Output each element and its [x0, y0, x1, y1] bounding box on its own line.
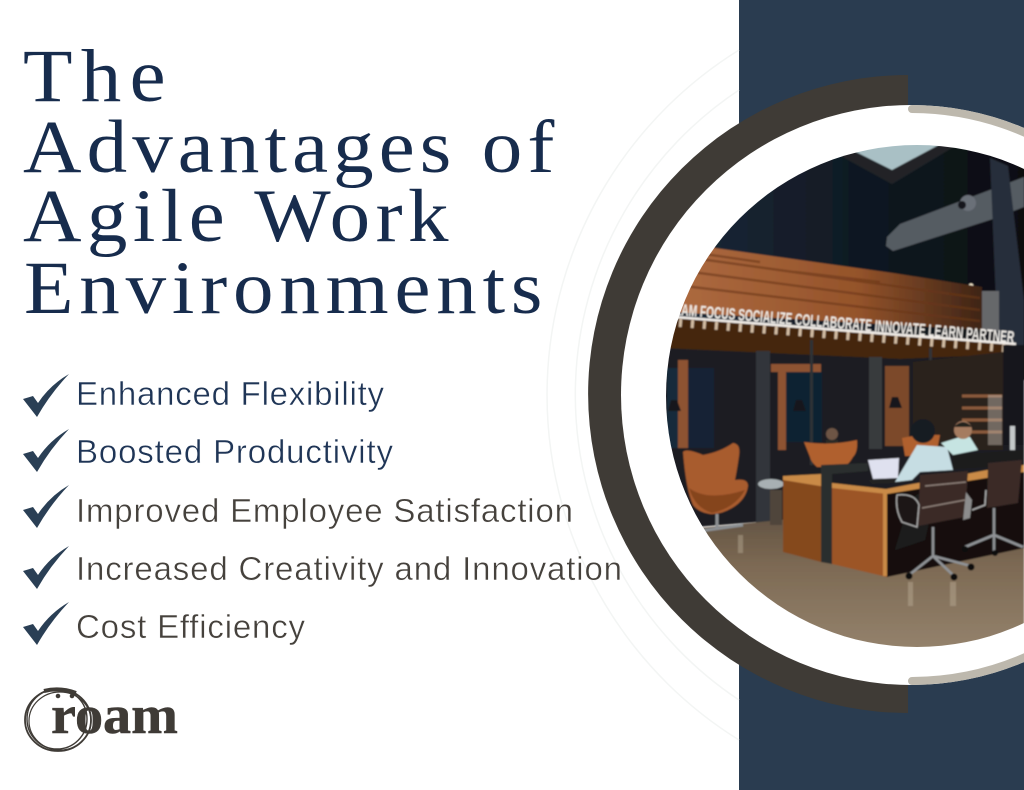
navy side panel — [739, 0, 1024, 790]
photo: pendant lamps — [668, 397, 902, 411]
photo: foreground office chair — [897, 471, 974, 580]
photo: seated background person — [826, 428, 838, 446]
photo: back right wall — [981, 291, 999, 331]
photo: wood feature wall — [672, 247, 982, 330]
logo wordmark: roam — [51, 685, 178, 745]
title: Agile Work — [23, 174, 450, 257]
taupe arc — [912, 109, 1024, 681]
list item: Improved Employee Satisfaction: Improved Employee Satisfaction — [76, 492, 573, 529]
logo rings — [25, 689, 91, 751]
photo: polished floor — [702, 519, 1024, 647]
photo: wooden desk — [783, 450, 1024, 577]
photo: glass office wall — [660, 340, 1024, 530]
photo: slatted canopy — [660, 316, 1018, 359]
list item: Cost Efficiency — [23, 602, 306, 645]
roam logo — [25, 685, 178, 751]
advantages list — [23, 374, 622, 645]
photo: monitor — [1010, 426, 1015, 450]
photo: background orange chairs — [804, 435, 940, 467]
title: Environments — [24, 246, 542, 329]
photo: ceiling skylight — [842, 145, 953, 184]
office photo — [660, 140, 1024, 650]
photo: orange egg chair — [683, 443, 748, 531]
title: Advantages of — [23, 105, 554, 188]
photo: back wall — [660, 140, 1024, 380]
list item: Enhanced Flexibility: Enhanced Flexibility — [76, 375, 384, 412]
photo: duct — [886, 177, 1024, 251]
faint decorative rings — [547, 50, 739, 740]
list item: Boosted Productivity: Boosted Productivity — [76, 433, 394, 470]
photo: seated man background — [941, 421, 978, 455]
photo: second office chair — [962, 460, 1023, 556]
title: The — [23, 34, 166, 117]
list item: Cost Efficiency: Cost Efficiency — [76, 608, 306, 645]
list item: Increased Creativity and Innovation: Increased Creativity and Innovation — [76, 550, 622, 587]
title — [23, 34, 554, 329]
photo: seated man foreground — [895, 419, 953, 550]
photo: side table — [758, 479, 784, 525]
photo: laptop — [868, 458, 900, 484]
photo: ceiling spotlights — [968, 282, 975, 287]
white circle — [621, 105, 1024, 685]
dark arc ring — [588, 75, 908, 713]
photo: floor reflections — [738, 535, 956, 606]
photo: steel column — [989, 158, 1024, 346]
